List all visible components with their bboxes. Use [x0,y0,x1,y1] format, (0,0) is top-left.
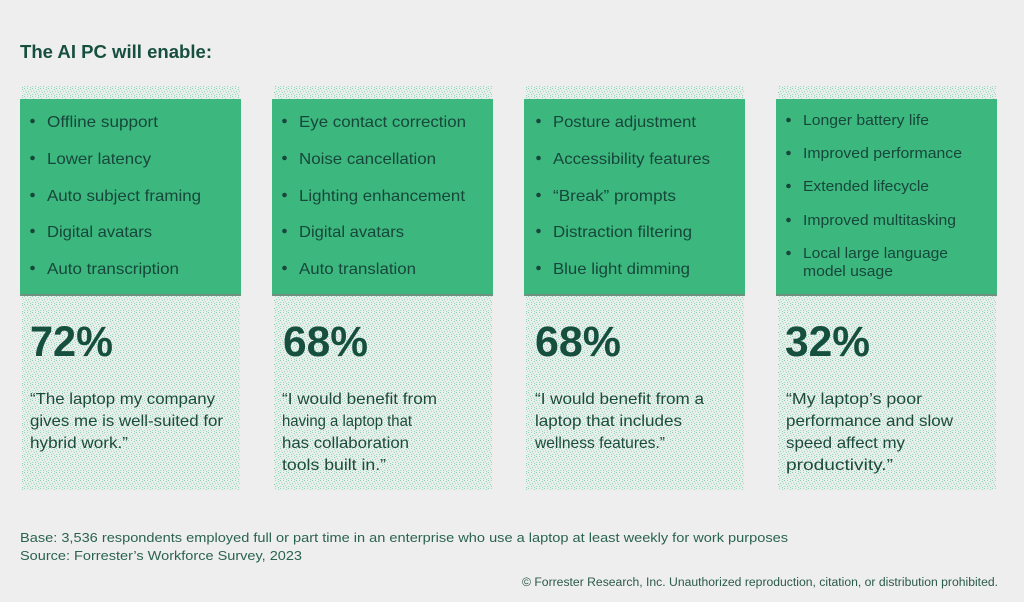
column 3 quote: wellness features.” [534,435,665,452]
column 4 quote: speed affect my [786,435,905,452]
column 4 quote [786,391,953,474]
column 3 feature list: Distraction filtering [553,224,692,241]
column 2 quote: has collaboration [282,435,409,452]
column 1 green box [20,99,241,296]
column 3 percentage: 68% [535,318,621,366]
footnote: base and source [20,530,789,563]
column 3 feature list: Posture adjustment [553,114,697,131]
column 1 quote: gives me is well-suited for [30,413,224,430]
column 4 dotted background [778,86,996,490]
column 4 quote: performance and slow [786,413,953,430]
column 4 green box [776,99,997,296]
column 3 dotted background [526,86,744,490]
column 2 feature list: Lighting enhancement [299,188,466,205]
copyright notice: © Forrester Research, Inc. Unauthorized reproduction, citation, or distribution prohibited. [522,577,998,589]
column 3 quote [534,391,704,452]
column 3 feature list: Accessibility features [553,151,710,168]
column 2 feature list: Noise cancellation [299,151,436,168]
column 2 quote [282,391,437,474]
column 1 dotted background [22,86,240,490]
panel: column 1 [20,86,241,490]
column 4 feature list: Improved performance [803,145,962,162]
column 3 feature list [536,114,710,278]
column 1 quote: hybrid work.” [30,435,128,452]
column 3 green box [524,99,745,296]
column 1 percentage: 72% [30,318,113,366]
column 2 dotted background [274,86,492,490]
column 2 green box [272,99,493,296]
title: The AI PC will enable: [20,42,212,62]
column 2 feature list [282,114,466,278]
column 3 quote: laptop that includes [535,413,682,430]
column 2 quote: “I would benefit from [282,391,437,408]
column 1 quote [30,391,224,452]
column 4 feature list: Improved multitasking [803,212,956,229]
column 4 quote: “My laptop’s poor [786,391,923,408]
column 4 feature list: Local large language [803,245,948,262]
column 1 feature list: Auto transcription [47,261,179,278]
column 4 feature list: Extended lifecycle [803,178,929,195]
column 1 feature list: Auto subject framing [47,188,201,205]
panel: column 2 [272,86,493,490]
column 3 quote: “I would benefit from a [535,391,704,408]
column 2 quote: having a laptop that [282,413,413,430]
column 2 percentage: 68% [283,318,368,366]
panel: column 3 [524,86,745,490]
footnote: base and source: Base: 3,536 respondents employed full or part time in an enterprise who use a laptop at least weekly for work purposes [20,530,789,545]
column 2 quote: tools built in.” [282,457,386,474]
column 3 feature list: Blue light dimming [553,261,690,278]
panel: column 4 [776,86,997,490]
column 3 feature list: “Break” prompts [553,188,676,205]
column 2 feature list: Eye contact correction [299,114,466,131]
column 1 feature list: Lower latency [47,151,151,168]
column 4 feature list: Longer battery life [803,112,929,129]
column 4 feature list: model usage [803,263,893,280]
column 4 feature list [786,112,962,280]
footnote: base and source: Source: Forrester’s Workforce Survey, 2023 [20,548,302,563]
column 2 feature list: Auto translation [299,261,416,278]
column 4 quote: productivity.” [786,457,893,474]
column 1 quote: “The laptop my company [30,391,215,408]
column 1 feature list: Digital avatars [47,224,152,241]
column 4 percentage: 32% [785,318,870,366]
column 1 feature list: Offline support [47,114,159,131]
column 1 feature list [30,114,201,278]
column 2 feature list: Digital avatars [299,224,404,241]
